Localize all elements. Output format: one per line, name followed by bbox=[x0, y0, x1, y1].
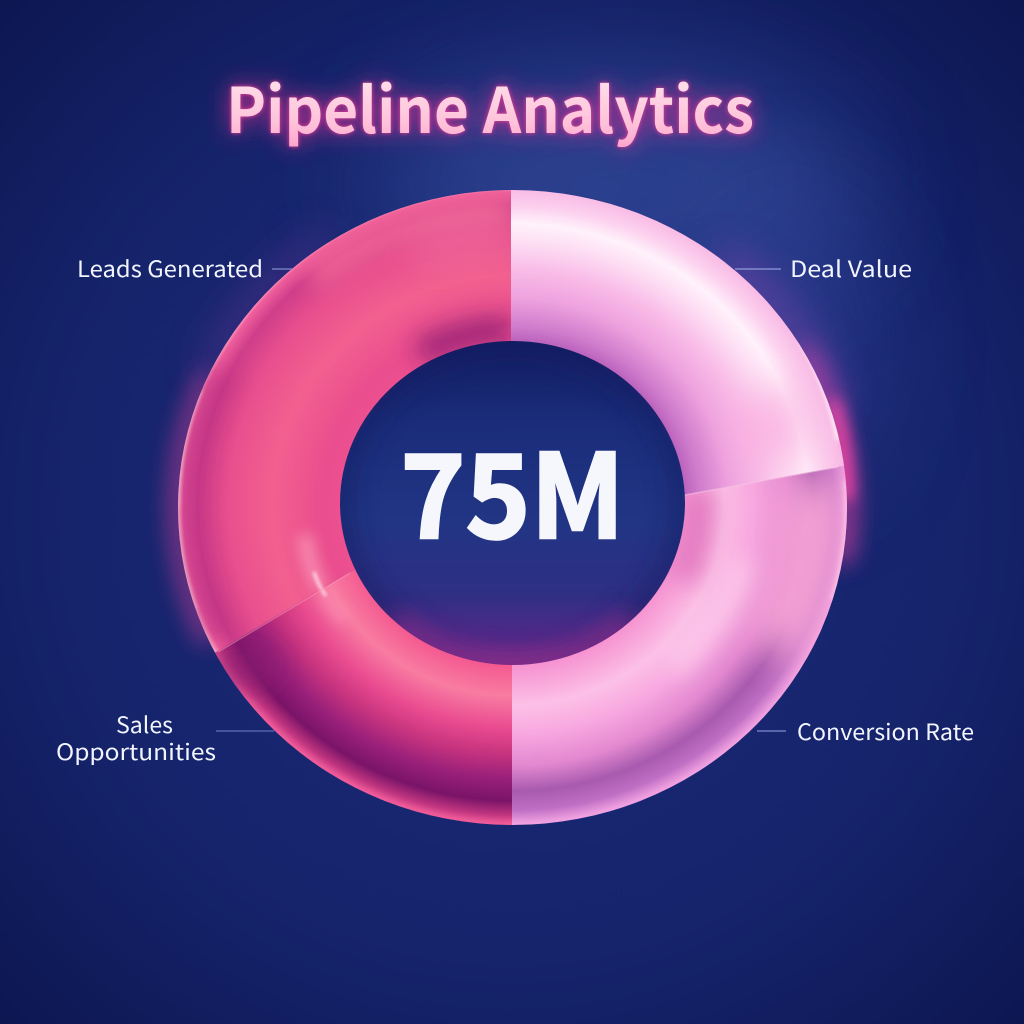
label: leads generated: Leads Generated bbox=[77, 252, 263, 284]
title: Pipeline Analytics bbox=[226, 61, 754, 152]
segment: sales opportunities bbox=[215, 569, 512, 825]
divider: lower left bbox=[218, 573, 350, 652]
specular glint at lower-left divider bbox=[314, 572, 326, 596]
label: sales opportunities bbox=[56, 708, 274, 767]
title: Pipeline Analytics bbox=[226, 61, 754, 152]
label: sales opportunities: Opportunities bbox=[56, 735, 216, 767]
centre value: 75M bbox=[400, 404, 624, 572]
inner hole bbox=[338, 339, 686, 667]
label: deal value: Deal Value bbox=[790, 252, 912, 284]
segment: leads generated bbox=[178, 190, 511, 653]
segment: deal value bbox=[511, 190, 844, 495]
donut chart bbox=[178, 190, 847, 825]
segment: conversion rate bbox=[512, 466, 847, 825]
divider: right bbox=[685, 467, 838, 495]
label: conversion rate: Conversion Rate bbox=[797, 715, 974, 747]
ring outer glow bbox=[178, 240, 847, 642]
title: Pipeline Analytics bbox=[226, 61, 754, 152]
label: sales opportunities: Sales bbox=[116, 708, 173, 740]
